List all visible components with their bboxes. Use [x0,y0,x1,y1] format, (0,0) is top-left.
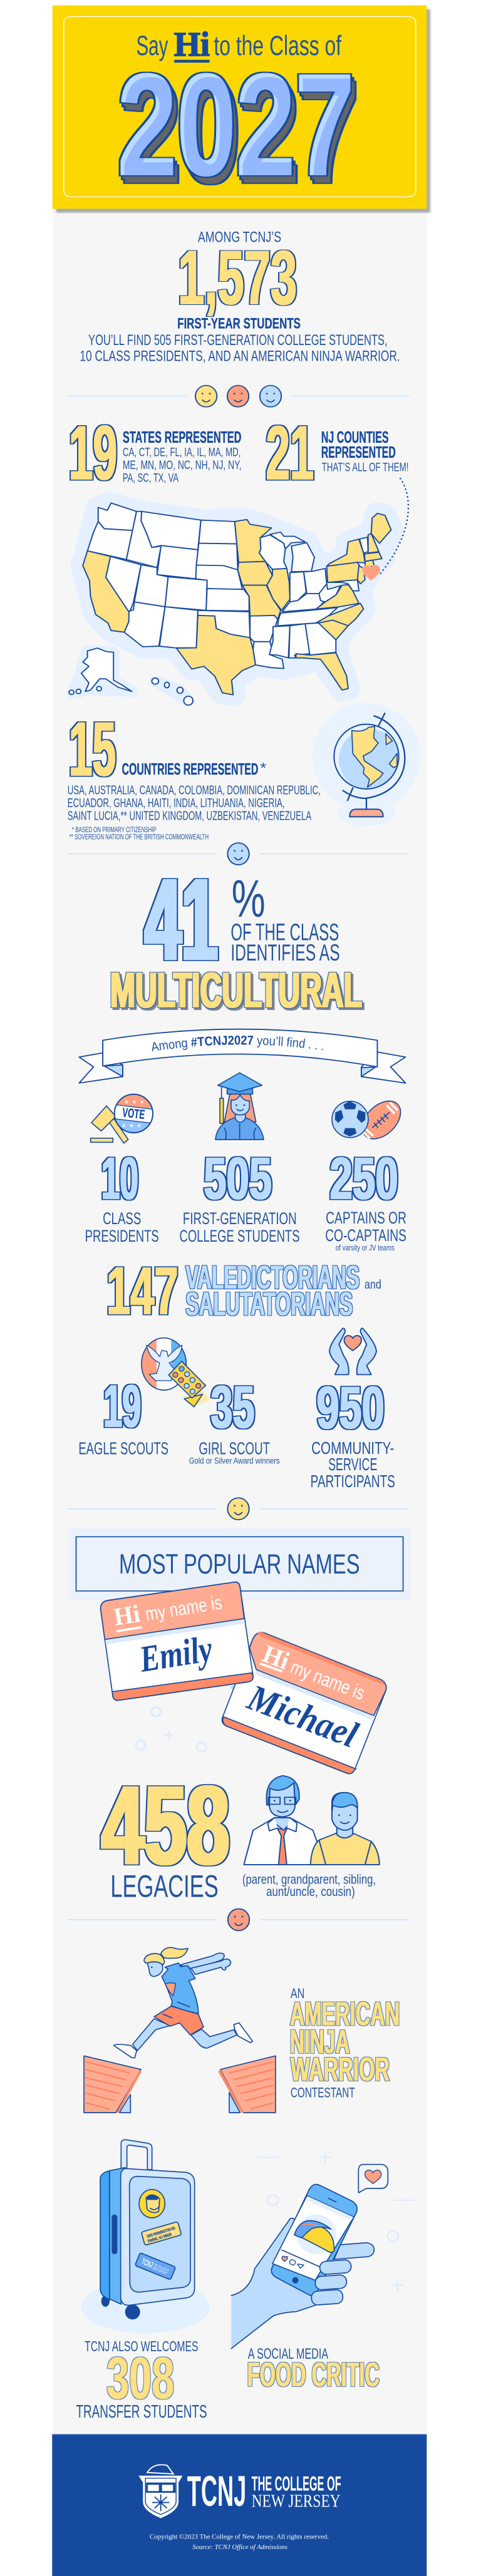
text block: 15 countries: 15 [69,706,116,792]
stat: 10 class presidents: PRESIDENTS [85,1227,159,1245]
banner: among TCNJ2027 [78,1028,406,1084]
stat: 458 legacies: 458 [101,1763,229,1888]
stat: 147 valedictorians and salutatorians [106,1253,381,1329]
text block: 308 transfer students: 308 [106,2345,174,2411]
text block: social media food critic [247,2346,380,2394]
icon: vote badge and gavel: VOTE [122,1105,145,1122]
text block: copyright and source: Copyright ©2023 The College of New Jersey. All rights reserved. [150,2533,329,2540]
stat: 19 eagle scouts: EAGLE SCOUTS [78,1440,168,1458]
stat: 950 community service: 950 [316,1374,385,1441]
illustration: suitcase [81,2140,210,2333]
stat: 250 captains: CAPTAINS OR [326,1208,406,1227]
text block: 308 transfer students: TRANSFER STUDENTS [76,2402,207,2422]
text block: 19 states: CA, CT, DE, FL, IA, IL, MA, MD, [123,445,240,459]
text block: 15 countries: * [260,760,266,776]
stat: 35 girl scouts: 35 [210,1374,255,1441]
illustration: runner [114,1947,252,2058]
illustration: suitcase: 2000 PENNINGTON RD [147,2226,176,2239]
panel: transfer and food critic [52,2151,427,2576]
text block: 41 percent multicultural: IDENTIFIES AS [230,940,340,966]
text block: among TCNJ's 1,573: FIRST-YEAR STUDENTS [177,315,301,332]
stat: 147 valedictorians and salutatorians: and [365,1277,381,1292]
stat: 458 legacies: (parent, grandparent, sibling, [242,1872,376,1887]
stat: 10 class presidents [85,1146,159,1245]
map: United States [69,503,391,705]
stat: 35 girl scouts: Gold or Silver Award winners [189,1456,280,1466]
panel: page background [53,200,427,2576]
banner: among TCNJ2027: Among #TCNJ2027 you’ll find . . . [152,1036,323,1052]
stat: 19 eagle scouts: 19 [103,1373,141,1440]
text block: 308 transfer students [76,2339,207,2422]
stat: 505 first-generation: FIRST-GENERATION [183,1209,297,1228]
icon: hands holding heart [329,1328,376,1374]
name tag: Emily: my name is [144,1592,224,1625]
text block: 19 states: ME, MN, MO, NC, NH, NJ, NY, [123,458,241,472]
stat: 250 captains: 250 [330,1146,398,1212]
stat: 950 community service: SERVICE [328,1455,377,1475]
icon: TCNJ shield [138,2465,182,2518]
stat: 250 captains: CO-CAPTAINS [325,1226,406,1245]
footer [52,2434,427,2576]
text block: 15 countries: COUNTRIES REPRESENTED [122,760,258,778]
name tag: Michael [222,1632,386,1774]
illustration: right ramp [218,2056,276,2113]
text block: 41 percent multicultural: % [232,868,266,928]
illustration: suitcase: TCNJ [140,2257,154,2270]
panel: header [53,6,430,407]
text block: 19 states: STATES REPRESENTED [123,428,241,446]
stat: 147 valedictorians and salutatorians: 147 [106,1253,178,1329]
icon: yellow smiley [227,1498,249,1520]
text block: social media food critic: FOOD CRITIC [247,2356,380,2394]
icon: three smiley faces [195,386,281,407]
decorative marks [136,1707,206,1752]
icon: graduate [215,1073,264,1140]
stat: 35 girl scouts: GIRL SCOUT [199,1440,270,1458]
illustration: suitcase: EWING, NJ 08628 [147,2232,172,2244]
text block: 21 counties: 21 [266,410,314,496]
panel: legacies [68,1763,409,2100]
icon: vote badge and gavel: ★ ★ ★ [124,1098,145,1105]
icon: New Jersey heart [363,565,380,580]
text block: 19 states: 19 [69,410,117,496]
text block: 21 counties: REPRESENTED [321,443,396,461]
stat: 19 eagle scouts [78,1373,168,1458]
text block: American Ninja Warrior contestant: NINJA [290,2023,349,2061]
illustration: ninja warrior runner and ramps [84,1947,276,2113]
icon: eagle badge and award ribbon [142,1337,210,1407]
heading: most popular names: MOST POPULAR NAMES [119,1548,360,1580]
illustration: left ramp [84,2056,142,2113]
text block: 21 counties: NJ COUNTIES [321,428,389,446]
stat: 250 captains: of varsity or JV teams [336,1244,395,1252]
name tag: Emily [101,1582,253,1701]
stat: 505 first-generation [180,1146,300,1245]
text block: 15 countries: * BASED ON PRIMARY CITIZENSHIP [72,825,157,834]
title: say hi to the class of: Hi [174,25,210,64]
name tag: Emily: Hi [111,1599,142,1631]
text block: 15 countries: ECUADOR, GHANA, HAITI, INDIA, LITHUANIA, NIGERIA, [68,795,285,810]
text block: 15 countries: ** SOVEREIGN NATION OF THE BRITISH COMMONWEALTH [70,833,209,841]
panel: states and countries [68,410,408,841]
text block: 21 counties: THAT’S ALL OF THEM! [322,460,408,474]
stat: 10 class presidents: CLASS [103,1209,141,1228]
stat: 458 legacies [101,1763,376,1904]
stat: 10 class presidents: 10 [101,1146,138,1212]
stat: 505 first-generation: COLLEGE STUDENTS [180,1227,300,1245]
panel: scouts and names [68,1253,410,1600]
illustration: suitcase: THE COLLEGE OF [153,2264,170,2273]
text block: American Ninja Warrior contestant [290,1986,400,2100]
icon: vote badge and gavel: ★ ★ ★ [122,1123,142,1129]
panel: multicultural and stats [68,842,409,1252]
stat: 458 legacies: LEGACIES [110,1868,219,1904]
title: say hi to the class of: Say [136,31,168,61]
stat: 950 community service: PARTICIPANTS [311,1472,395,1491]
icon: soccer ball and football [332,1094,408,1146]
stat: 505 first-generation: 505 [204,1146,272,1212]
text block: American Ninja Warrior contestant: CONTESTANT [291,2084,355,2100]
logo text: TCNJ The College of New Jersey: NEW JERSEY [252,2491,341,2511]
stat: 950 community service [311,1374,395,1491]
icon: heart speech bubble [358,2165,388,2193]
logo text: TCNJ The College of New Jersey: TCNJ [187,2468,246,2515]
text block: 15 countries [68,706,321,841]
icon: orange smiley [228,1909,249,1930]
icon: vote badge and gavel [91,1094,155,1143]
icon: globe [313,703,420,827]
name tag: Michael: my name is [287,1656,368,1704]
text block: 15 countries: SAINT LUCIA,** UNITED KINGDOM, UZBEKISTAN, VENEZUELA [68,808,312,823]
text block: 21 counties [266,410,408,496]
text block: 41 percent multicultural: 41 [145,855,218,984]
text block: American Ninja Warrior contestant: AN [291,1986,304,2001]
text block: among TCNJ's 1,573: 1,573 [178,235,297,321]
heading: most popular names [68,1528,410,1600]
stat: 950 community service: COMMUNITY- [311,1439,394,1458]
text block: social media food critic: A SOCIAL MEDIA [248,2346,328,2362]
name tag: Michael: Hi [259,1639,293,1675]
text block: 308 transfer students: TCNJ ALSO WELCOMES [85,2339,198,2355]
name tag: Emily: Emily [137,1627,215,1680]
title: say hi to the class of: to the Class of [214,31,341,61]
text block: copyright and source: Source: TCNJ Office of Admissions [192,2544,287,2551]
stat: 250 captains [325,1146,406,1252]
text block: American Ninja Warrior contestant: WARRIOR [291,2050,390,2088]
footer: THE COLLEGE OF [252,2473,341,2495]
icon: parent and son [244,1776,380,1865]
text block: among TCNJ's 1,573 [80,229,400,364]
text block: 19 states [69,410,241,496]
stat: 458 legacies: aunt/uncle, cousin) [266,1884,355,1899]
text block: among TCNJ's 1,573: AMONG TCNJ’S [198,229,281,245]
illustration: hand holding phone [231,2185,374,2349]
text block: copyright and source [150,2533,329,2551]
icon: blue smiley [227,843,249,865]
illustration: suitcase: NEW JERSEY [152,2267,168,2276]
title: say hi to the class of [136,25,341,64]
name tag: Michael: Michael [242,1676,364,1756]
text block: 41 percent multicultural [110,855,362,1018]
text block: 19 states: PA, SC, TX, VA [123,471,178,485]
stat: 35 girl scouts [189,1374,280,1466]
arrow: dotted line to New Jersey [380,478,408,574]
text block: 41 percent multicultural: OF THE CLASS [230,919,339,945]
